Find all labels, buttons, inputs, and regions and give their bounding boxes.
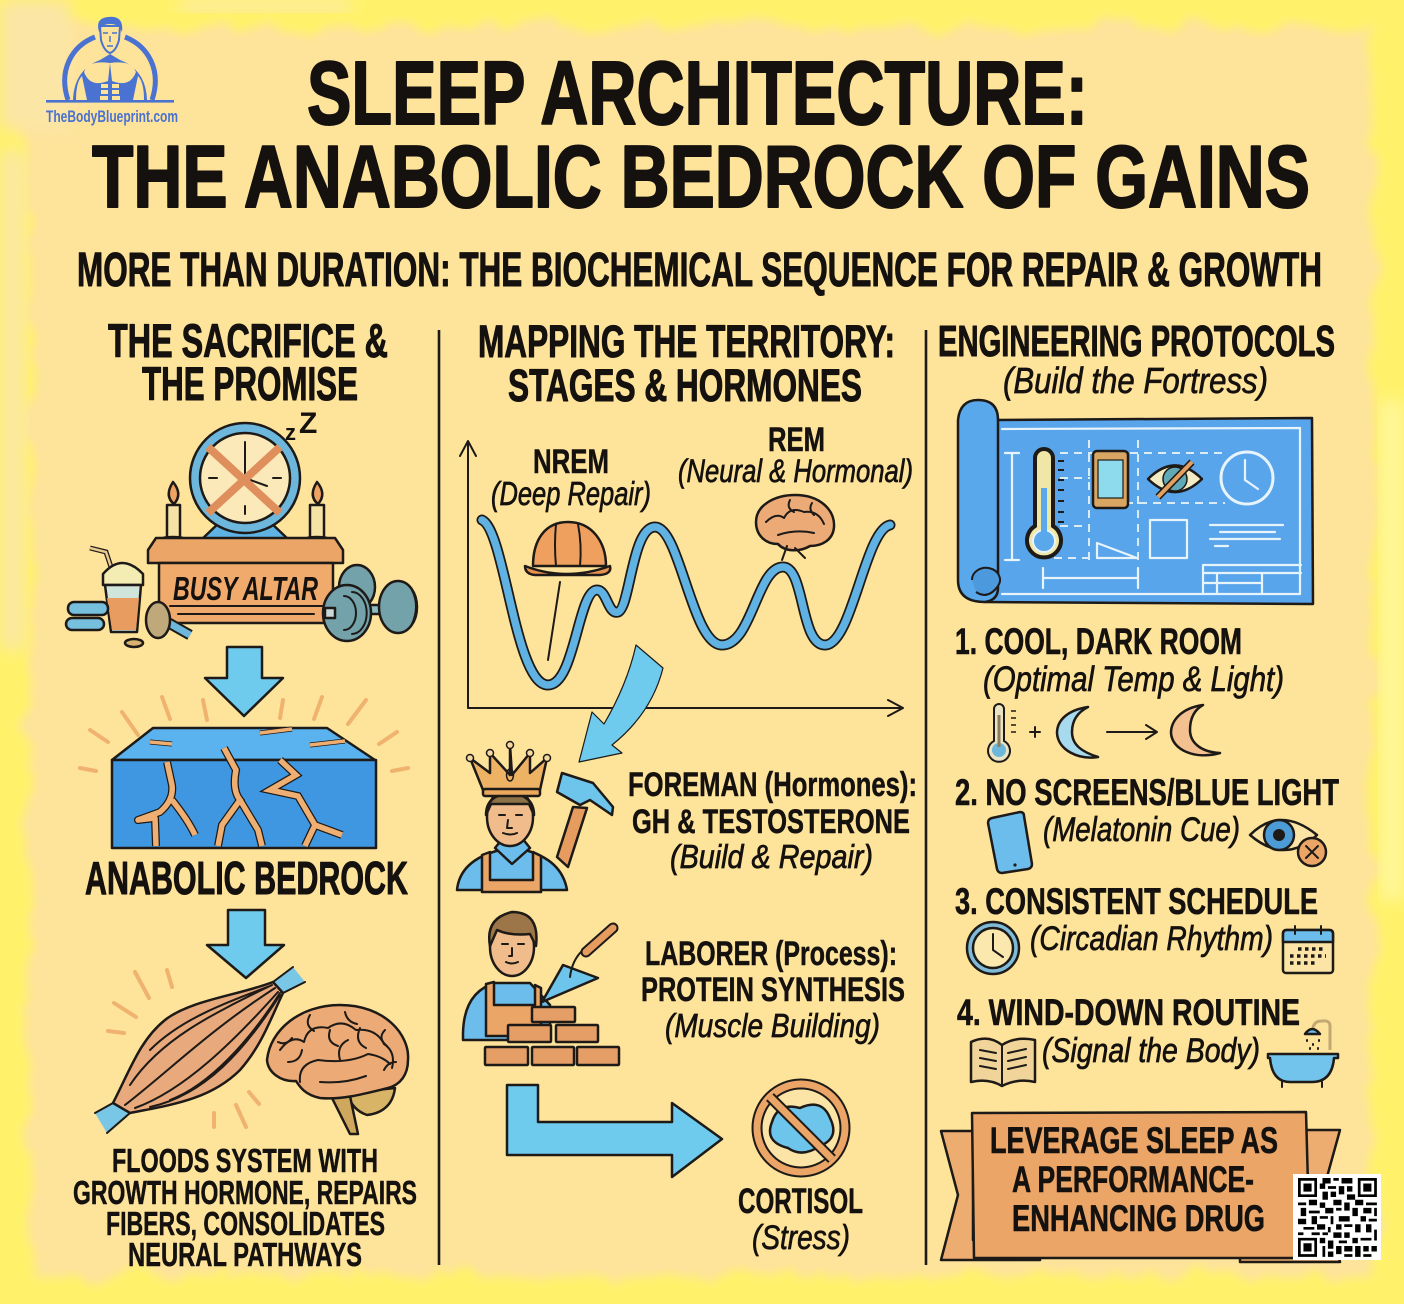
label: NREM xyxy=(491,443,651,512)
icon: eye with cross xyxy=(1250,820,1326,866)
panel: sacrifice and promise xyxy=(66,314,417,1273)
heading: engineering protocols xyxy=(938,317,1335,401)
text: cortisol xyxy=(738,1182,863,1257)
label: NREM: NREM xyxy=(533,443,609,481)
heading: mapping the territory: MAPPING THE TERRITORY: xyxy=(478,316,895,367)
icon: foreman with crown and hammer xyxy=(457,742,613,892)
icon: blueprint xyxy=(958,400,1313,604)
text: foreman hormones xyxy=(628,766,917,875)
heading: the sacrifice and the promise xyxy=(108,314,388,410)
label: anabolic bedrock: ANABOLIC BEDROCK xyxy=(85,852,408,904)
icon: laborer with trowel and bricks xyxy=(463,912,619,1065)
icon: clock xyxy=(967,922,1019,974)
text: floods system: NEURAL PATHWAYS xyxy=(128,1236,362,1273)
panel: engineering protocols xyxy=(938,317,1340,1262)
text: foreman hormones: (Build & Repair) xyxy=(670,838,873,875)
text: floods system: FLOODS SYSTEM WITH xyxy=(112,1142,378,1179)
icon: small brain xyxy=(756,495,834,560)
arrow: curved from NREM to foreman xyxy=(579,645,663,762)
text: cortisol: CORTISOL xyxy=(738,1182,863,1221)
icon: temperature and moons xyxy=(988,704,1220,762)
text: floods system: FIBERS, CONSOLIDATES xyxy=(106,1205,385,1242)
panel: stages and hormones xyxy=(457,316,917,1257)
logo: TheBodyBlueprint xyxy=(46,17,178,126)
arrow: altar to bedrock xyxy=(205,647,283,716)
label: REM: REM xyxy=(768,421,825,459)
text: floods system: GROWTH HORMONE, REPAIRS xyxy=(73,1174,417,1211)
icon: no cortisol xyxy=(757,1084,845,1172)
step 4: wind-down routine: (Signal the Body) xyxy=(1042,1032,1260,1070)
icon: busy altar with crossed-out clock: z xyxy=(285,420,296,445)
callout banner: leverage sleep: LEVERAGE SLEEP AS xyxy=(990,1120,1278,1161)
step 1: cool dark room: (Optimal Temp & Light) xyxy=(983,660,1284,699)
title: SLEEP ARCHITECTURE: xyxy=(307,44,1088,144)
heading: mapping the territory: STAGES & HORMONES xyxy=(508,360,862,411)
text: floods system xyxy=(73,1142,417,1273)
text: foreman hormones: FOREMAN (Hormones): xyxy=(628,766,917,804)
column dividers xyxy=(439,330,926,1265)
logo: TheBodyBlueprint: TheBodyBlueprint.com xyxy=(46,107,178,126)
text: cortisol: (Stress) xyxy=(752,1219,850,1257)
heading: the sacrifice and the promise: THE SACRIFICE & xyxy=(108,314,388,367)
icon: bathtub xyxy=(1268,1021,1338,1087)
icon: muscle and brain xyxy=(95,967,408,1134)
callout banner: leverage sleep: A PERFORMANCE- xyxy=(1012,1159,1254,1200)
icon: calendar xyxy=(1283,926,1333,973)
icon: hard hat xyxy=(525,522,610,660)
label: REM: (Neural & Hormonal) xyxy=(678,453,913,489)
arrow: bedrock to muscle and brain xyxy=(207,910,284,978)
QR code xyxy=(1293,1174,1381,1260)
label: REM xyxy=(678,421,913,489)
title xyxy=(92,44,1310,226)
icon: busy altar with crossed-out clock: Z xyxy=(299,407,317,440)
icon: busy altar with crossed-out clock xyxy=(66,407,417,647)
step 2: no screens: (Melatonin Cue) xyxy=(1043,811,1240,849)
icon: busy altar with crossed-out clock: BUSY ALTAR xyxy=(173,570,318,607)
step 1: cool dark room xyxy=(955,621,1284,762)
step 4: wind-down routine: 4. WIND-DOWN ROUTINE xyxy=(957,992,1300,1033)
arrow: bent arrow to cortisol xyxy=(507,1085,722,1177)
chart: sleep stage wave xyxy=(460,421,913,716)
step 4: wind-down routine xyxy=(957,992,1338,1087)
heading: the sacrifice and the promise: THE PROMISE xyxy=(142,357,358,410)
label: NREM: (Deep Repair) xyxy=(491,475,651,512)
text: laborer process: LABORER (Process): xyxy=(645,935,897,973)
callout banner: leverage sleep: ENHANCING DRUG xyxy=(1012,1198,1265,1239)
text: laborer process xyxy=(641,935,905,1044)
step 2: no screens xyxy=(955,772,1339,873)
icon: cracked anabolic bedrock xyxy=(80,697,408,848)
text: laborer process: (Muscle Building) xyxy=(665,1007,880,1044)
text: foreman hormones: GH & TESTOSTERONE xyxy=(632,803,910,841)
step 1: cool dark room: 1. COOL, DARK ROOM xyxy=(955,621,1242,662)
heading: engineering protocols: (Build the Fortress) xyxy=(1003,360,1268,401)
icon: open book xyxy=(971,1039,1035,1086)
heading: mapping the territory xyxy=(478,316,895,411)
icon: phone xyxy=(988,812,1032,873)
step 3: consistent schedule xyxy=(955,881,1333,974)
step 3: consistent schedule: (Circadian Rhythm) xyxy=(1030,920,1273,958)
callout banner: leverage sleep xyxy=(941,1112,1340,1262)
text: laborer process: PROTEIN SYNTHESIS xyxy=(641,971,905,1009)
